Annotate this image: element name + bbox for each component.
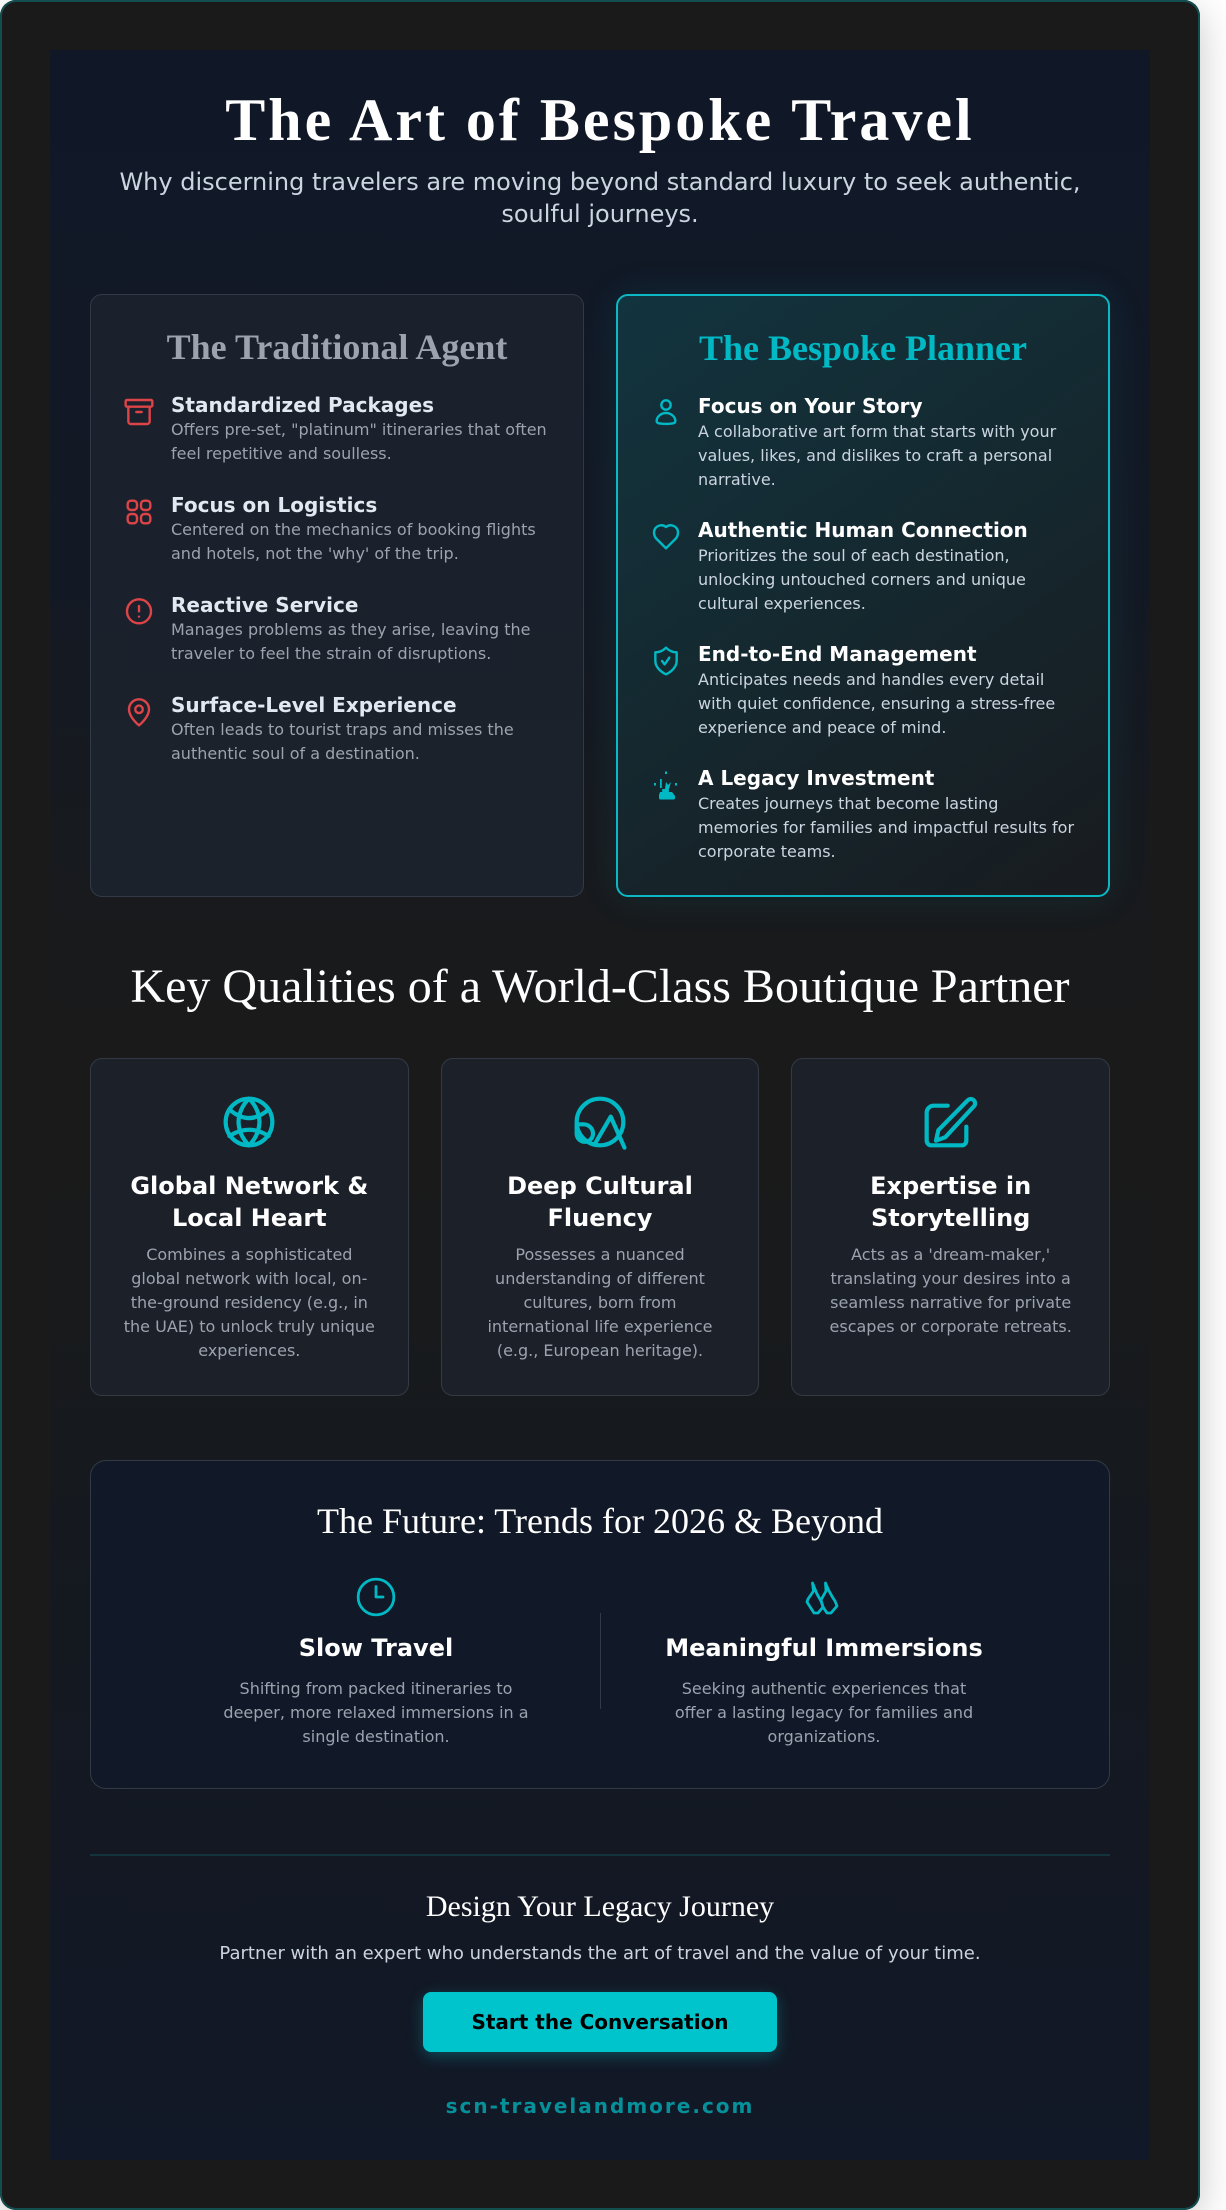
card description: (e.g., European heritage). — [497, 1341, 703, 1360]
card description: cultures, born from — [523, 1293, 677, 1312]
panel: the traditional agent — [90, 294, 584, 897]
icon: heart — [652, 524, 680, 550]
item description: Anticipates needs and handles every detail — [698, 670, 1044, 689]
panel: deep cultural fluency — [441, 1058, 759, 1396]
card heading: Local Heart — [172, 1204, 327, 1232]
heading: future trends: The Future: Trends for 2026 & Beyond — [317, 1501, 883, 1541]
item description — [171, 620, 530, 663]
card heading — [870, 1172, 1031, 1232]
item heading: A Legacy Investment — [698, 766, 934, 790]
card heading: Deep Cultural — [507, 1172, 693, 1200]
card description: Acts as a 'dream-maker,' — [851, 1245, 1050, 1264]
item heading: End-to-End Management — [698, 642, 977, 666]
item description: authentic soul of a destination. — [171, 744, 420, 763]
item: standardized packages — [124, 393, 547, 463]
item: surface-level experience — [128, 693, 514, 763]
item description: Manages problems as they arise, leaving the — [171, 620, 530, 639]
item: focus on logistics — [126, 493, 536, 563]
panel: expertise in storytelling — [791, 1058, 1110, 1396]
card description: understanding of different — [495, 1269, 705, 1288]
card heading — [507, 1172, 693, 1232]
trend description: Seeking authentic experiences that — [682, 1679, 966, 1698]
trend description: single destination. — [302, 1727, 450, 1746]
subtitle: Why discerning travelers are moving beyond standard luxury to seek authentic, — [119, 168, 1081, 196]
item: end-to-end management — [654, 642, 1055, 737]
item description — [698, 794, 1074, 861]
item description: with quiet confidence, ensuring a stress-free — [698, 694, 1055, 713]
item: authentic human connection — [652, 518, 1028, 613]
icon: twin drops — [806, 1582, 838, 1614]
item description — [698, 670, 1055, 737]
footer rule — [90, 1854, 1110, 1856]
item description — [171, 520, 536, 563]
item description: Creates journeys that become lasting — [698, 794, 998, 813]
card description: global network with local, on- — [131, 1269, 367, 1288]
section heading: key qualities: Key Qualities of a World-Class Boutique Partner — [130, 960, 1070, 1013]
card description: Possesses a nuanced — [515, 1245, 685, 1264]
card description — [124, 1245, 375, 1360]
item heading: Focus on Logistics — [171, 493, 377, 517]
divider between trends — [600, 1613, 601, 1709]
icon: clock — [356, 1578, 396, 1616]
panel: the bespoke planner — [616, 294, 1110, 897]
icon: alert circle — [126, 598, 152, 624]
item description — [698, 546, 1026, 613]
card description — [487, 1245, 713, 1360]
item description: feel repetitive and soulless. — [171, 444, 392, 463]
icon: shield check — [654, 646, 678, 676]
trend: slow travel — [223, 1578, 529, 1746]
card description — [830, 1245, 1072, 1336]
card heading: Global Network & — [130, 1172, 368, 1200]
trend description — [675, 1679, 973, 1746]
cta button — [423, 1992, 777, 2052]
item description: memories for families and impactful results for — [698, 818, 1074, 837]
trend: meaningful immersions — [665, 1582, 983, 1746]
item heading: Standardized Packages — [171, 393, 434, 417]
item: focus on your story — [656, 394, 1056, 489]
icon: pen on square — [924, 1096, 978, 1148]
card description: escapes or corporate retreats. — [830, 1317, 1072, 1336]
item description: experience and peace of mind. — [698, 718, 946, 737]
item description: Offers pre-set, "platinum" itineraries that often — [171, 420, 547, 439]
card description: the UAE) to unlock truly unique — [124, 1317, 375, 1336]
item description: corporate teams. — [698, 842, 836, 861]
trend description: Shifting from packed itineraries to — [240, 1679, 512, 1698]
item description — [171, 420, 547, 463]
trend description: organizations. — [768, 1727, 880, 1746]
item description: narrative. — [698, 470, 776, 489]
trend description — [223, 1679, 529, 1746]
item: reactive service — [126, 593, 530, 663]
icon: circle with mountain — [574, 1096, 627, 1150]
item description: Often leads to tourist traps and misses the — [171, 720, 514, 739]
item description: traveler to feel the strain of disruptions. — [171, 644, 491, 663]
panel: call to action — [90, 1854, 1110, 2124]
card description: experiences. — [198, 1341, 300, 1360]
cta text: Partner with an expert who understands the art of travel and the value of your time. — [219, 1943, 981, 1964]
card heading — [130, 1172, 368, 1232]
item description — [171, 720, 514, 763]
card heading: Fluency — [548, 1204, 652, 1232]
icon: map pin — [128, 698, 150, 727]
item heading: Surface-Level Experience — [171, 693, 457, 717]
item description: A collaborative art form that starts with your — [698, 422, 1056, 441]
item heading: Focus on Your Story — [698, 394, 923, 418]
panel: global network — [90, 1058, 409, 1396]
subtitle: soulful journeys. — [501, 200, 699, 228]
card description: translating your desires into a — [830, 1269, 1071, 1288]
item: a legacy investment — [654, 766, 1074, 861]
item description: values, likes, and dislikes to craft a personal — [698, 446, 1052, 465]
item heading: Reactive Service — [171, 593, 358, 617]
cta button: Start the Conversation — [471, 2010, 729, 2034]
heading: the traditional agent: The Traditional Agent — [167, 327, 507, 367]
trend heading: Slow Travel — [299, 1634, 453, 1662]
trend description: deeper, more relaxed immersions in a — [223, 1703, 529, 1722]
website link: scn-travelandmore.com — [446, 2094, 754, 2118]
panel: future trends — [90, 1460, 1110, 1789]
heading: the bespoke planner: The Bespoke Planner — [699, 328, 1027, 368]
title: The Art of Bespoke Travel — [225, 87, 975, 153]
card heading: Storytelling — [871, 1204, 1030, 1232]
item description: unlocking untouched corners and unique — [698, 570, 1026, 589]
item heading: Authentic Human Connection — [698, 518, 1028, 542]
trend heading: Meaningful Immersions — [665, 1634, 983, 1662]
trend description: offer a lasting legacy for families and — [675, 1703, 973, 1722]
card description: seamless narrative for private — [830, 1293, 1071, 1312]
item description: and hotels, not the 'why' of the trip. — [171, 544, 459, 563]
card description: international life experience — [487, 1317, 713, 1336]
card description: Combines a sophisticated — [146, 1245, 352, 1264]
icon: archive box — [124, 398, 154, 426]
item description: Prioritizes the soul of each destination, — [698, 546, 1010, 565]
heading: design your legacy journey: Design Your Legacy Journey — [426, 1890, 774, 1923]
item description: cultural experiences. — [698, 594, 866, 613]
subtitle — [119, 168, 1081, 228]
card description: the-ground residency (e.g., in — [131, 1293, 368, 1312]
item description — [698, 422, 1056, 489]
icon: four squares — [126, 500, 152, 524]
icon: sparkle pile — [654, 772, 677, 800]
icon: globe — [224, 1096, 274, 1148]
icon: person — [656, 399, 676, 426]
item description: Centered on the mechanics of booking flights — [171, 520, 536, 539]
card heading: Expertise in — [870, 1172, 1031, 1200]
